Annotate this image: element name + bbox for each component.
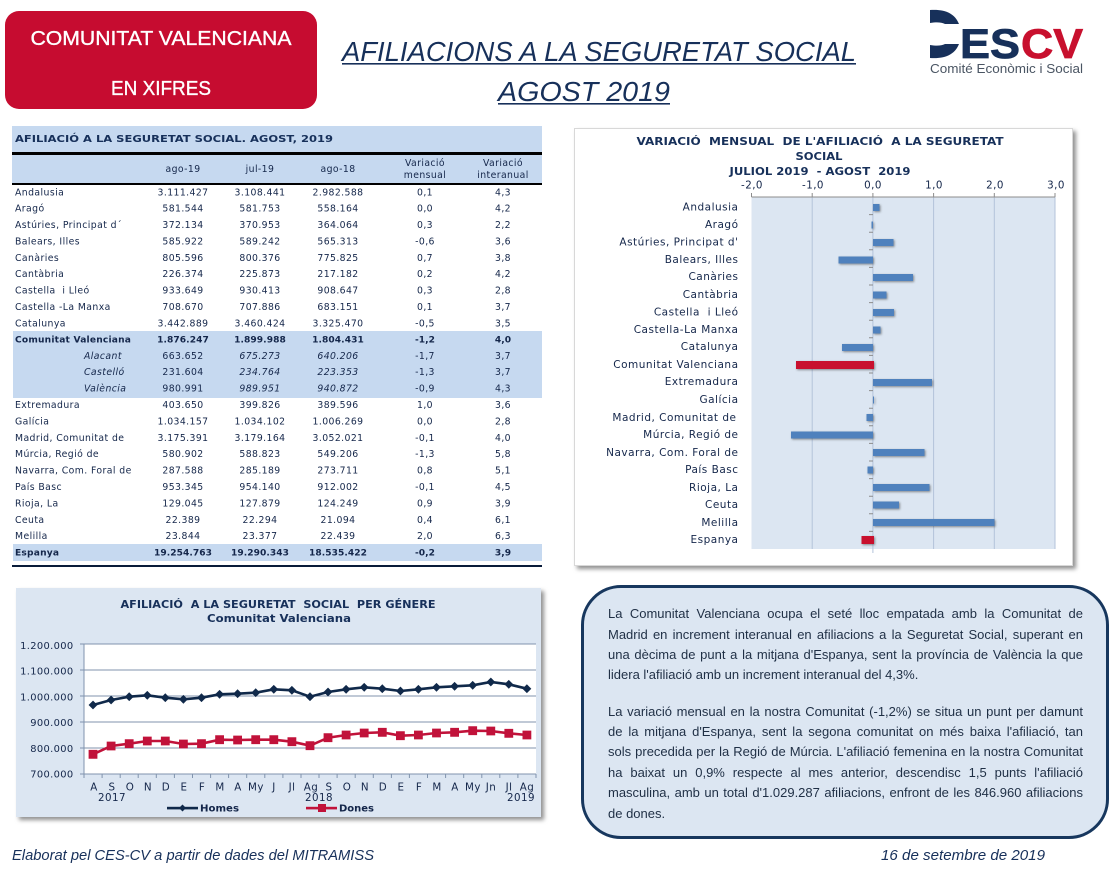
row: Melilla: Melilla xyxy=(15,531,48,542)
row: Navarra: 287.588 xyxy=(162,466,204,476)
row: Catalunya: 3.460.424 xyxy=(235,318,285,329)
row: Alacant: 663.652 xyxy=(162,351,204,362)
row: Espanya: Espanya xyxy=(15,548,59,558)
row: Galícia xyxy=(15,416,511,428)
row: Andalusia: 3.111.427 xyxy=(158,188,208,198)
row: Ceuta xyxy=(15,515,511,526)
commentary text box: masculina, amb un total d'1.029.287 afiliacions, enfront de les 846.960 afiliacions xyxy=(608,785,1083,800)
row: València: 940.872 xyxy=(317,384,359,394)
value axis labels: 0,0 xyxy=(864,180,882,192)
row: Navarra: Navarra, Com. Foral de xyxy=(15,466,132,476)
line chart title xyxy=(120,598,436,625)
row: Canàries: Canàries xyxy=(15,253,59,264)
commentary text box: La variació mensual en la nostra Comunitat (-1,2%) se situa un punt per damunt xyxy=(608,704,1083,719)
row: Alacant: Alacant xyxy=(83,351,122,362)
x axis month and year labels: 2018 xyxy=(305,792,333,804)
row: Rioja: 129.045 xyxy=(162,498,204,510)
main title: AFILIACIONS A LA SEGURETAT SOCIAL xyxy=(340,36,856,67)
row: València: València xyxy=(84,384,126,394)
x axis month and year labels: Jl xyxy=(288,782,295,794)
row: Comunitat Valenciana: -1,2 xyxy=(415,336,435,346)
row: Catalunya xyxy=(15,318,511,329)
footer date: 16 de setembre de 2019 xyxy=(881,848,1045,864)
row: Cantàbria: 226.374 xyxy=(162,269,204,280)
value axis labels: 2,0 xyxy=(986,180,1004,192)
row: Extremadura xyxy=(15,400,511,411)
row: Múrcia xyxy=(15,449,511,460)
row: Melilla: 23.844 xyxy=(166,531,200,542)
x axis month and year labels: D xyxy=(162,782,170,794)
row: Andalusia: 4,3 xyxy=(495,188,511,198)
line chart title: Comunitat Valenciana xyxy=(207,614,351,625)
row: Astúries: 370.953 xyxy=(239,220,281,231)
row: Aragó xyxy=(15,204,511,215)
row: Balears: 585.922 xyxy=(162,236,204,248)
bar chart plot background and grid xyxy=(752,193,1055,553)
commentary text box: de dones. xyxy=(608,806,665,821)
row: Comunitat Valenciana: 1.899.988 xyxy=(234,336,286,346)
commentary text box: una dècima de punt a la mitjana d'Espanya, sent la província de València la que xyxy=(608,647,1083,662)
row: Galícia: Galícia xyxy=(15,416,49,428)
row: País Basc xyxy=(15,482,511,493)
category labels: Castella-La Manxa xyxy=(634,324,738,336)
row: Espanya: 19.290.343 xyxy=(231,548,289,558)
row: Catalunya: 3,5 xyxy=(495,318,511,329)
x axis month and year labels: 2017 xyxy=(98,792,126,804)
row: València: 980.991 xyxy=(162,384,204,394)
value axis labels: 3,0 xyxy=(1047,180,1065,192)
row: Balears: -0,6 xyxy=(415,236,435,248)
row: Ceuta: 22.294 xyxy=(243,515,277,526)
table header row: ago-18 xyxy=(320,164,356,175)
row: Espanya: 18.535.422 xyxy=(309,548,367,558)
legend: Homes xyxy=(200,804,239,814)
row: Castella-La Manxa: 683.151 xyxy=(317,302,359,313)
row: Madrid: Madrid, Comunitat de xyxy=(15,433,124,444)
x axis month and year labels: A xyxy=(451,782,459,794)
row: Castella-La Manxa: Castella -La Manxa xyxy=(15,302,111,313)
row: Astúries: 2,2 xyxy=(495,220,511,231)
row: Múrcia: 5,8 xyxy=(495,449,511,460)
table header row xyxy=(12,152,542,185)
row: Ceuta: Ceuta xyxy=(15,515,45,526)
row: Canàries: 0,7 xyxy=(417,253,433,264)
highlighted band: Comunitat Valenciana xyxy=(13,331,542,398)
row: Aragó: 581.544 xyxy=(162,204,204,215)
category labels: Astúries, Principat d' xyxy=(619,236,738,248)
category labels: Catalunya xyxy=(681,341,738,353)
row: País Basc: 912.002 xyxy=(317,482,359,493)
x axis month and year labels: Ag xyxy=(304,782,318,794)
row: Alacant: -1,7 xyxy=(415,351,435,362)
row: Navarra: 273.711 xyxy=(317,466,359,476)
logo: CES-CV: CV xyxy=(1021,20,1083,67)
row: Astúries: 372.134 xyxy=(162,220,204,231)
row: País Basc: País Basc xyxy=(15,482,62,493)
row: Múrcia: 588.823 xyxy=(239,449,281,460)
row: Cantàbria: Cantàbria xyxy=(15,269,64,280)
row: Astúries xyxy=(15,220,511,231)
row: Castella i Lleó: 2,8 xyxy=(495,286,511,297)
x axis month and year labels: My xyxy=(248,782,264,794)
row: Galícia: 1.034.157 xyxy=(158,416,208,428)
category labels: Rioja, La xyxy=(689,482,738,494)
row: Castella i Lleó: 933.649 xyxy=(162,286,204,297)
row: País Basc: 954.140 xyxy=(239,482,281,493)
category labels: Aragó xyxy=(705,219,738,231)
series: Dones xyxy=(89,727,531,758)
row: Cantàbria: 4,2 xyxy=(495,269,511,280)
row: Castelló: 234.764 xyxy=(239,367,281,378)
bars xyxy=(791,204,994,544)
x axis month and year labels: My xyxy=(465,782,481,794)
x axis month and year labels: F xyxy=(416,782,422,794)
row: Comunitat Valenciana: 1.876.247 xyxy=(157,336,209,346)
row: Catalunya: Catalunya xyxy=(15,318,66,329)
y axis labels: 1.100.000 xyxy=(20,666,74,678)
category labels: Comunitat Valenciana xyxy=(613,359,738,371)
commentary text box xyxy=(581,585,1109,839)
value axis labels: -1,0 xyxy=(802,180,824,192)
logo: CES-CV: ES xyxy=(960,20,1020,67)
row: Aragó: 581.753 xyxy=(239,204,281,215)
row: Catalunya: 3.325.470 xyxy=(313,318,363,329)
category labels: Balears, Illes xyxy=(665,254,738,266)
table bottom rule xyxy=(12,565,542,567)
x axis month and year labels: J xyxy=(271,782,276,794)
row: Comunitat Valenciana: 4,0 xyxy=(495,336,511,346)
row: Balears xyxy=(15,236,511,248)
main title xyxy=(340,36,856,107)
row: València: -0,9 xyxy=(415,384,435,394)
value axis labels: 1,0 xyxy=(925,180,943,192)
row: Rioja: 127.879 xyxy=(239,498,281,510)
row: Cantàbria: 0,2 xyxy=(417,269,433,280)
row: València xyxy=(84,384,511,394)
row: Galícia: 1.034.102 xyxy=(235,416,285,428)
table header row: interanual xyxy=(477,170,529,181)
bar chart title: SOCIAL xyxy=(796,152,843,163)
logo: CES-CV xyxy=(930,10,1083,76)
bar chart title: JULIOL 2019 - AGOST 2019 xyxy=(728,167,910,178)
line chart title: AFILIACIÓ A LA SEGURETAT SOCIAL PER GÉNERE xyxy=(120,598,436,611)
row: País Basc: 953.345 xyxy=(162,482,204,493)
table header row: jul-19 xyxy=(245,164,274,175)
row: Castella-La Manxa: 708.670 xyxy=(162,302,204,313)
x axis month and year labels: Ag xyxy=(520,782,534,794)
bar chart title: VARIACIÓ MENSUAL DE L'AFILIACIÓ A LA SEGURETAT xyxy=(636,135,1004,148)
table header row: Variació xyxy=(405,158,445,169)
row: Múrcia: -1,3 xyxy=(415,449,435,460)
row: Madrid: 3.179.164 xyxy=(235,433,285,444)
panel: data table xyxy=(12,126,542,567)
row: Astúries: 364.064 xyxy=(317,220,359,231)
row: Castella-La Manxa xyxy=(15,302,511,313)
row: Canàries: 805.596 xyxy=(162,253,204,264)
table title band: AFILIACIÓ A LA SEGURETAT SOCIAL. AGOST, 2019 xyxy=(15,133,333,145)
x axis month and year labels: S xyxy=(108,782,116,794)
x axis month and year labels: O xyxy=(343,782,351,794)
row: Comunitat Valenciana: 1.804.431 xyxy=(312,336,364,346)
row: Madrid: 3.052.021 xyxy=(313,433,363,444)
x axis month and year labels: M xyxy=(432,782,442,794)
category labels: Galícia xyxy=(699,394,738,406)
row: Castelló: 231.604 xyxy=(162,367,204,378)
y axis labels: 800.000 xyxy=(30,744,74,755)
header badge: Comunitat Valenciana en xifres: EN XIFRES xyxy=(111,77,211,100)
row: Castelló: 3,7 xyxy=(495,367,511,378)
row: Ceuta: 0,4 xyxy=(417,515,433,526)
row: Múrcia: 580.902 xyxy=(162,449,204,460)
category labels: País Basc xyxy=(685,464,738,476)
row: Castelló xyxy=(84,367,511,378)
row: Comunitat Valenciana xyxy=(15,336,511,346)
y axis labels: 700.000 xyxy=(30,770,74,780)
y axis labels: 1.200.000 xyxy=(20,641,74,652)
row: Cantàbria: 217.182 xyxy=(317,269,359,280)
x axis month and year labels: O xyxy=(126,782,134,794)
row: Comunitat Valenciana: Comunitat Valenciana xyxy=(15,336,131,346)
row: Canàries: 775.825 xyxy=(317,253,359,264)
row: Alacant: 675.273 xyxy=(239,351,281,362)
category labels: Extremadura xyxy=(665,376,738,388)
x axis month and year labels: A xyxy=(90,782,98,794)
row: Catalunya: -0,5 xyxy=(415,318,435,329)
panel: monthly variation bar chart xyxy=(574,128,1072,566)
row: Castella i Lleó: 930.413 xyxy=(239,286,281,297)
row: Navarra xyxy=(15,466,511,476)
header badge: Comunitat Valenciana en xifres xyxy=(5,11,317,109)
row: Alacant: 640.206 xyxy=(317,351,359,362)
row: Andalusia: Andalusia xyxy=(15,188,64,198)
row: Múrcia: 549.206 xyxy=(317,449,359,460)
row: Extremadura: 1,0 xyxy=(417,400,433,411)
table header row: ago-19 xyxy=(165,164,201,175)
series: Homes xyxy=(89,678,531,709)
row: Rioja: 0,9 xyxy=(417,498,433,510)
row: Galícia: 2,8 xyxy=(495,416,511,428)
x axis month and year labels: A xyxy=(234,782,242,794)
x axis month and year labels: Jl xyxy=(505,782,512,794)
category labels: Castella i Lleó xyxy=(654,306,738,318)
row: Castella i Lleó: 908.647 xyxy=(317,286,359,297)
row: Espanya: 19.254.763 xyxy=(154,548,212,558)
row: Cantàbria xyxy=(15,269,511,280)
x axis month and year labels: S xyxy=(326,782,332,794)
row: Cantàbria: 225.873 xyxy=(239,269,281,280)
main title: AGOST 2019 xyxy=(496,76,670,107)
row: Rioja: Rioja, La xyxy=(15,498,59,510)
row: Balears: 3,6 xyxy=(495,236,511,248)
row: Galícia: 0,0 xyxy=(417,416,433,428)
row: Galícia: 1.006.269 xyxy=(313,416,363,428)
row: Madrid: 4,0 xyxy=(495,433,511,444)
row: Astúries: 0,3 xyxy=(417,220,433,231)
row: Múrcia: Múrcia, Regió de xyxy=(15,449,99,460)
row: Ceuta: 21.094 xyxy=(321,515,355,526)
row: Aragó: 0,0 xyxy=(417,204,433,215)
x axis month and year labels: 2019 xyxy=(507,792,535,804)
row: Canàries xyxy=(15,253,511,264)
panel: gender line chart xyxy=(16,588,541,817)
row: Canàries: 800.376 xyxy=(239,253,281,264)
row: Ceuta: 6,1 xyxy=(495,515,511,526)
x axis month and year labels xyxy=(90,782,535,804)
row: Melilla xyxy=(15,531,511,542)
header badge: Comunitat Valenciana en xifres: COMUNITAT VALENCIANA xyxy=(30,27,292,50)
x axis month and year labels: N xyxy=(361,782,369,794)
row: Castelló: -1,3 xyxy=(415,367,435,378)
row: Castelló: Castelló xyxy=(84,367,125,378)
row: Andalusia: 0,1 xyxy=(417,188,433,198)
legend xyxy=(167,804,374,814)
row: Extremadura: 403.650 xyxy=(162,400,204,411)
row: Espanya: -0,2 xyxy=(415,548,435,558)
row: Balears: Balears, Illes xyxy=(15,236,80,248)
row: Melilla: 6,3 xyxy=(495,531,511,542)
x axis month and year labels: N xyxy=(144,782,152,794)
row: Andalusia: 3.108.441 xyxy=(235,188,285,198)
table header row: mensual xyxy=(404,170,446,181)
row: Navarra: 285.189 xyxy=(239,466,281,476)
y axis labels: 1.000.000 xyxy=(20,692,74,704)
value axis labels: -2,0 xyxy=(741,180,763,192)
row: Balears: 589.242 xyxy=(239,236,281,248)
row: País Basc: -0,1 xyxy=(415,482,435,493)
row: Astúries: Astúries, Principat d´ xyxy=(15,220,122,231)
x axis month and year labels: E xyxy=(181,782,187,794)
commentary text box: La Comunitat Valenciana ocupa el seté lloc empatada amb la Comunitat de xyxy=(608,606,1083,621)
highlighted band: Espanya xyxy=(13,544,542,561)
row: Melilla: 22.439 xyxy=(321,531,355,542)
row: Aragó: Aragó xyxy=(15,204,45,215)
category labels: Canàries xyxy=(688,271,738,283)
x axis month and year labels: Jn xyxy=(485,782,496,794)
row: Madrid xyxy=(15,433,511,444)
row: País Basc: 4,5 xyxy=(495,482,511,493)
row: Melilla: 23.377 xyxy=(243,531,277,542)
row: Rioja: 3,9 xyxy=(495,498,511,510)
row: València: 4,3 xyxy=(495,384,511,394)
y axis labels xyxy=(20,641,74,780)
table title band xyxy=(12,126,542,152)
footer source note: Elaborat pel CES-CV a partir de dades del MITRAMISS xyxy=(12,848,374,864)
row: Castella-La Manxa: 0,1 xyxy=(417,302,433,313)
row: Espanya: 3,9 xyxy=(495,548,511,558)
row: Castella-La Manxa: 3,7 xyxy=(495,302,511,313)
category labels: Madrid, Comunitat de xyxy=(612,412,736,424)
row: Extremadura: 3,6 xyxy=(495,400,511,411)
x axis month and year labels: E xyxy=(398,782,404,794)
logo: CES-CV: Comité Econòmic i Social xyxy=(930,62,1083,76)
value axis labels xyxy=(741,180,1065,192)
category labels: Melilla xyxy=(701,517,738,529)
category labels xyxy=(606,202,738,546)
category labels: Ceuta xyxy=(705,499,738,511)
row: Navarra: 5,1 xyxy=(495,466,511,476)
row: Madrid: 3.175.391 xyxy=(158,433,208,444)
row: Balears: 565.313 xyxy=(317,236,359,248)
x axis month and year labels: M xyxy=(215,782,225,794)
row: Castella i Lleó: 0,3 xyxy=(417,286,433,297)
commentary text box: sols precedida per la Regió de Múrcia. L'afiliació femenina en la nostra Comunitat xyxy=(608,744,1083,759)
commentary text box: de la mitjana d'Espanya, sent la segona comunitat on més baixa l'afiliació, tan xyxy=(608,724,1083,739)
plot area and grid xyxy=(80,644,536,778)
row: Castella-La Manxa: 707.886 xyxy=(239,302,281,313)
category labels: Navarra, Com. Foral de xyxy=(606,447,738,459)
table header row: Variació xyxy=(483,158,523,169)
legend: Dones xyxy=(339,804,374,814)
row: Extremadura: 399.826 xyxy=(239,400,281,411)
row: Aragó: 4,2 xyxy=(495,204,511,215)
row: Castella i Lleó xyxy=(15,286,511,297)
row: Andalusia xyxy=(15,188,511,198)
category labels: Espanya xyxy=(690,534,738,546)
x axis month and year labels: D xyxy=(379,782,387,794)
commentary text box: lidera l'afiliació amb un increment interanual del 4,3%. xyxy=(608,667,918,682)
row: València: 989.951 xyxy=(239,384,281,394)
row: Castella i Lleó: Castella i Lleó xyxy=(15,286,90,297)
category labels: Andalusia xyxy=(683,202,738,214)
row: Rioja: 124.249 xyxy=(317,498,359,510)
row: Melilla: 2,0 xyxy=(417,531,433,542)
row: Extremadura: 389.596 xyxy=(317,400,359,411)
category labels: Múrcia, Regió de xyxy=(643,429,738,441)
row: Espanya xyxy=(15,548,511,558)
row: Ceuta: 22.389 xyxy=(166,515,200,526)
y axis labels: 900.000 xyxy=(30,718,74,729)
row: Madrid: -0,1 xyxy=(415,433,435,444)
row: Alacant xyxy=(83,351,511,362)
commentary text box: ha baixat un 0,9% respecte al mes anterior, descendisc 1,5 punts l'afiliació xyxy=(608,765,1083,780)
commentary text box: Madrid en increment interanual en afiliacions a la Seguretat Social, superant en xyxy=(608,627,1083,642)
row: Castelló: 223.353 xyxy=(317,367,359,378)
category labels: Cantàbria xyxy=(683,289,738,301)
row: Andalusia: 2.982.588 xyxy=(313,188,363,198)
row: Canàries: 3,8 xyxy=(495,253,511,264)
row: Aragó: 558.164 xyxy=(317,204,359,215)
row: Rioja xyxy=(15,498,511,510)
row: Catalunya: 3.442.889 xyxy=(158,318,208,329)
row: Alacant: 3,7 xyxy=(495,351,511,362)
row: Extremadura: Extremadura xyxy=(15,400,80,411)
x axis month and year labels: F xyxy=(199,782,205,794)
bar chart title xyxy=(636,135,1004,178)
row: Navarra: 0,8 xyxy=(417,466,433,476)
